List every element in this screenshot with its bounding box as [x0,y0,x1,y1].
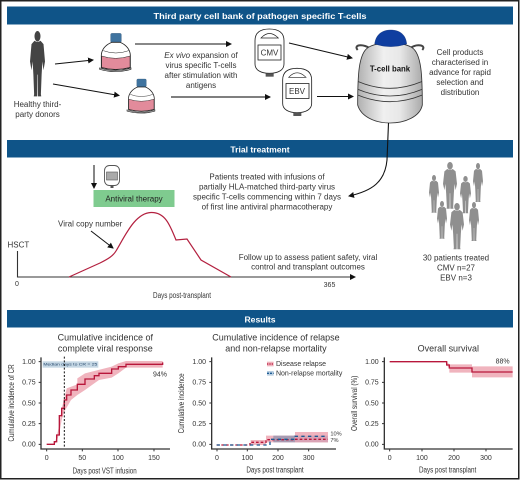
arrow: into antiviral therapy [93,165,95,188]
chart: relapse and non-relapse mortality: 0.00 [192,442,206,449]
arrow: donor to flask 1 [55,60,93,64]
chart: relapse and non-relapse mortality: 0.50 [192,400,206,407]
arrow: flask 2 to EBV [171,96,270,98]
expansion text: after stimulation with [165,71,237,80]
viral load curve [69,212,231,277]
icon: small IV bag [104,166,120,188]
chart: complete viral response: 150 [148,455,160,462]
follow up text: Follow up to assess patient safety, viral [239,253,378,262]
patient counts: 30 patients treated [423,254,489,262]
label: HSCT: HSCT [8,240,29,250]
chart: complete viral response: 0.25 [22,421,36,428]
chart: complete viral response: Days post VST infusion [73,466,137,475]
chart: complete viral response: complete viral response [58,344,153,354]
label: viral copy number: Viral copy number [58,220,123,228]
chart: overall survival: 0.50 [365,400,379,407]
header: third party cell bank: Third party cell bank of pathogen specific T-cells [154,11,367,21]
chart: overall survival: 88% [496,358,510,365]
axis tick labels: 365 [324,282,335,289]
chart: complete viral response: 94% [153,371,167,378]
header: results: Results [244,314,276,324]
chart: overall survival: Overall survival [418,344,479,354]
header: results [7,310,513,328]
chart: overall survival: 0.25 [365,421,379,428]
patient counts: EBV n=3 [440,274,472,282]
cell products text: Cell products [437,48,483,57]
chart: complete viral response: 0.00 [22,442,36,449]
chart: relapse and non-relapse mortality: Cumulative incidence of relapse [212,332,340,342]
chart: overall survival: 1.00 [365,359,379,366]
icon: EBV bag: EBV [289,87,306,96]
header: trial treatment [7,140,513,158]
chart: complete viral response: 1.00 [22,359,36,366]
icon: flask 2 [127,79,155,113]
arrow: EBV to bank [317,96,353,98]
axis tick labels: 0 [15,281,19,288]
chart: relapse and non-relapse mortality: 1.00 [192,359,206,366]
cell products text: characterised in [432,58,488,67]
chart: relapse and non-relapse mortality: 0.25 [192,421,206,428]
arrow: viral copy number [91,231,113,248]
icon: T-cell bank tank: T-cell bank [370,64,411,74]
chart: complete viral response: Median days to CR = 25 [43,363,97,367]
arrow: CMV to bank [289,43,352,58]
treatment text: Patients treated with infusions of [209,172,325,182]
arrow: tank to treatment text [349,123,388,196]
chart: overall survival: 300 [480,455,492,462]
chart: complete viral response: 100 [112,455,124,462]
chart: relapse and non-relapse mortality: 0 [215,455,219,462]
chart: relapse and non-relapse mortality: and non-relapse mortality [225,344,327,354]
chart: relapse and non-relapse mortality: Cumulative incidence [177,373,186,433]
chart: relapse and non-relapse mortality: 7% [330,438,339,444]
treatment text: partially HLA-matched third-party virus [199,182,335,192]
antiviral therapy box: Antiviral therapy [105,194,163,204]
expansion text: antigens [186,81,216,90]
chart: complete viral response: 0 [45,455,49,462]
header: third party cell bank [7,6,513,24]
chart: complete viral response: Cumulative incidence of CR [7,364,16,442]
icon: flask 1 [100,33,131,72]
chart: relapse and non-relapse mortality: 200 [272,455,284,462]
chart: relapse and non-relapse mortality: 100 [241,455,253,462]
chart: relapse and non-relapse mortality: Days post transplant [246,466,304,475]
chart: overall survival: 0 [388,455,392,462]
chart: complete viral response [7,332,170,475]
chart: overall survival: 200 [448,455,460,462]
treatment text: of first line antiviral pharmacotherapy [202,202,332,212]
header: trial treatment: Trial treatment [230,144,290,154]
icon: patient silhouettes [429,162,483,249]
icon: EBV bag [283,68,312,116]
chart: overall survival: 0.00 [365,442,379,449]
chart: relapse and non-relapse mortality: 0.75 [192,380,206,387]
cell products text: selection and [436,78,484,87]
chart: overall survival: Overall survival (%) [350,375,359,431]
chart: complete viral response: 0.50 [22,400,36,407]
chart: relapse and non-relapse mortality [177,332,343,475]
donor label: party donors [15,110,60,119]
treatment text: specific T-cells commencing within 7 days [193,192,341,202]
icon: donor silhouette [30,31,45,96]
antiviral therapy box [94,190,174,207]
chart: complete viral response: 50 [78,455,86,462]
arrow: flask 1 to CMV [135,43,231,45]
chart: complete viral response: 0.75 [22,380,36,387]
follow up text: control and transplant outcomes [251,262,365,272]
chart: complete viral response: Cumulative incidence of [58,332,154,342]
cell products text: distribution [441,88,479,97]
axis tick labels [15,281,335,289]
axis title: Days post-transplant [153,291,212,300]
chart: overall survival [350,344,513,475]
chart: relapse and non-relapse mortality: Disease relapse [276,361,326,368]
arrow: donor to flask 2 [53,84,119,96]
icon: CMV bag: CMV [261,48,279,58]
patient counts: CMV n=27 [437,264,476,272]
expansion text: virus specific T-cells [166,61,236,70]
chart: overall survival: 0.75 [365,380,379,387]
icon: CMV bag [255,29,284,77]
cell products text: advance for rapid [429,68,491,77]
donor label: Healthy third- [14,100,62,109]
chart: relapse and non-relapse mortality: 300 [303,455,315,462]
expansion text: Ex vivo expansion of [164,51,238,60]
chart: overall survival: Days post transplant [419,466,477,475]
icon: T-cell bank tank [356,30,423,123]
timeline axes [18,251,355,277]
chart: overall survival: 100 [416,455,428,462]
chart: relapse and non-relapse mortality: 10% [330,432,342,438]
chart: relapse and non-relapse mortality: Non-relapse mortality [276,370,343,377]
